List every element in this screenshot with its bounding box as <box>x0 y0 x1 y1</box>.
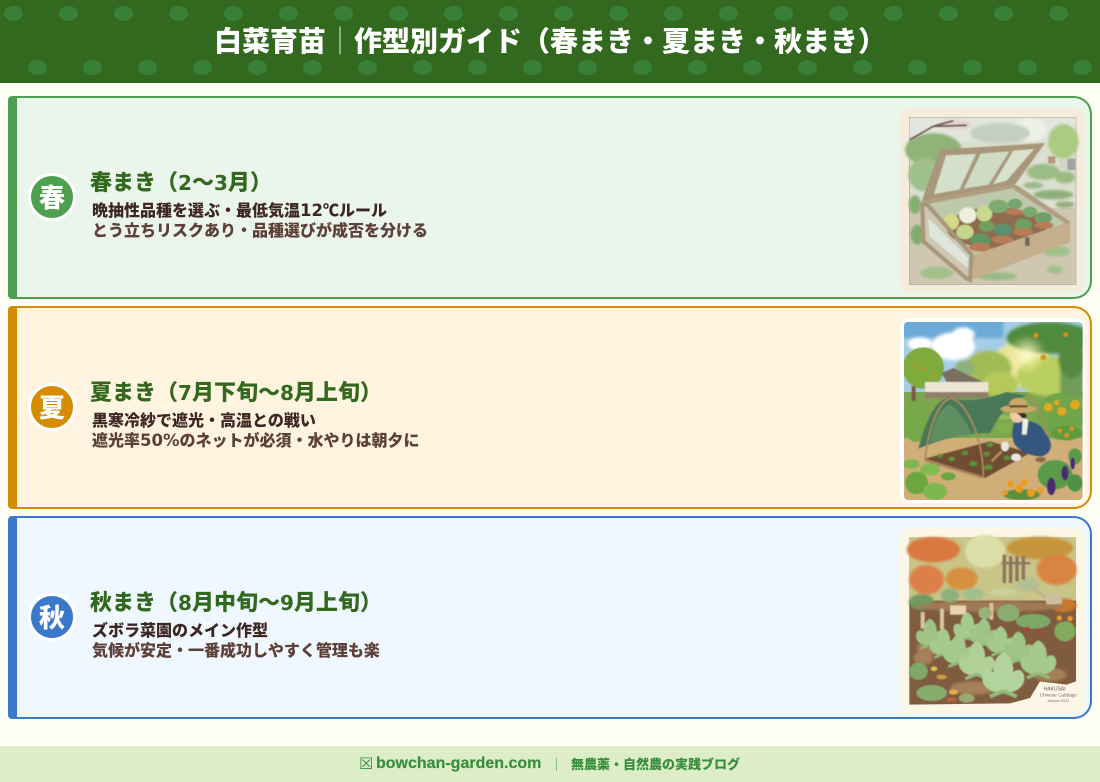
box inside <box>923 188 1068 256</box>
text block: autumn notes <box>92 617 380 661</box>
text block: autumn notes: ズボラ菜園のメイン作型 <box>92 617 268 641</box>
footer divider <box>556 758 557 771</box>
badge: 秋: 秋 <box>39 598 65 635</box>
tofu icon: ☒ <box>359 754 373 773</box>
text block: summer notes <box>92 407 420 451</box>
text block: spring notes: とう立ちリスクあり・品種選びが成否を分ける <box>92 217 428 241</box>
panel: autumn sowing <box>8 516 1092 719</box>
tagline: 無農薬・自然農の実践ブログ <box>571 754 740 773</box>
text block: autumn notes: 気候が安定・一番成功しやすく管理も楽 <box>92 637 380 661</box>
text block: spring notes: 晩抽性品種を選ぶ・最低気温12℃ルール <box>92 197 387 221</box>
header banner <box>0 0 1100 83</box>
image caption: HAKUSAI <box>1044 687 1066 693</box>
heading: spring: 春まき（2〜3月） <box>90 165 272 197</box>
text block: summer notes: 黒寒冷紗で遮光・高温との戦い <box>92 407 316 431</box>
footer <box>0 746 1100 782</box>
badge: 春: 春 <box>39 178 65 215</box>
badge: 夏: 夏 <box>39 388 65 425</box>
illustration: autumn cabbage bed <box>900 528 1085 713</box>
panel: summer sowing <box>8 306 1092 509</box>
illustration: autumn cabbage bed: Chinese Cabbage <box>1040 693 1077 698</box>
lid <box>922 143 1045 201</box>
illustration: autumn cabbage bed: Autumn 2023 <box>1047 699 1069 703</box>
heading: summer: 夏まき（7月下旬〜8月上旬） <box>90 375 382 407</box>
badge: 秋 <box>28 593 76 641</box>
site address: bowchan-garden.com <box>376 755 541 772</box>
text block: spring notes <box>92 197 428 241</box>
illustration: cold frame with seedlings <box>900 108 1085 293</box>
badge: 夏 <box>28 383 76 431</box>
illustration: shade net and gardener <box>900 318 1085 503</box>
title: 白菜育苗｜作型別ガイド（春まき・夏まき・秋まき） <box>214 20 886 60</box>
panel: spring sowing <box>8 96 1092 299</box>
badge: 春 <box>28 173 76 221</box>
heading: autumn: 秋まき（8月中旬〜9月上旬） <box>90 585 382 617</box>
text block: summer notes: 遮光率50%のネットが必須・水やりは朝夕に <box>92 427 420 451</box>
